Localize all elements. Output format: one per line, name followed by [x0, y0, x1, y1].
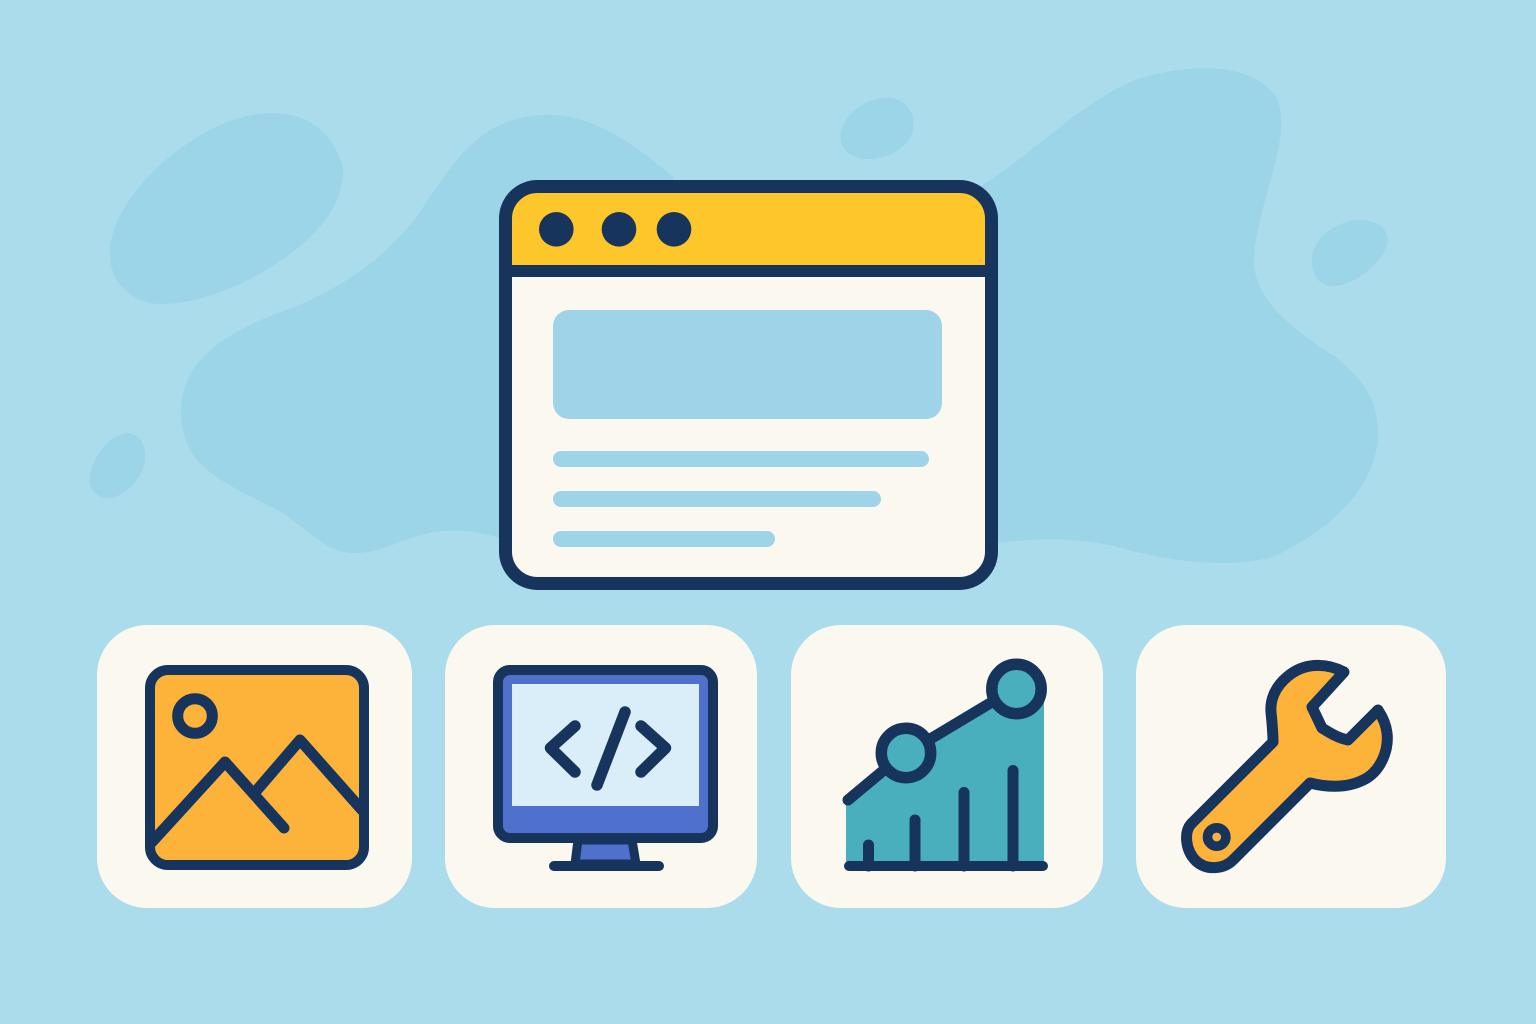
window body [506, 186, 992, 584]
background blobs [90, 68, 1388, 563]
card background [445, 625, 757, 908]
card: image [97, 625, 412, 908]
trend line [848, 702, 992, 800]
chart bars [868, 770, 1013, 866]
card: wrench [1136, 625, 1446, 908]
window control dots [539, 212, 691, 247]
text line placeholders [553, 451, 929, 547]
code symbol [550, 712, 666, 785]
wrench hole [1208, 828, 1226, 846]
chart nodes [881, 728, 931, 778]
monitor screen [512, 684, 699, 806]
chart area fill [846, 689, 1044, 862]
window outline [506, 186, 992, 584]
card background [791, 625, 1103, 908]
monitor stand [575, 840, 636, 864]
card background [97, 625, 412, 908]
blob: large central [181, 68, 1378, 563]
icon: picture [150, 670, 364, 865]
chart baseline [844, 861, 1048, 871]
blob: top centre [841, 98, 913, 159]
blob: top left [110, 113, 343, 304]
icon: wrench [1187, 665, 1387, 868]
title bar divider [505, 265, 992, 277]
window title bar [506, 186, 992, 271]
monitor frame [498, 670, 713, 838]
blob: right [1312, 220, 1388, 286]
card: code [445, 625, 757, 908]
card background [1136, 625, 1446, 908]
monitor base [549, 861, 664, 871]
card: chart [791, 625, 1103, 908]
blob: left [90, 433, 145, 498]
content image placeholder [553, 310, 942, 419]
icon: growth chart [844, 664, 1048, 871]
icon: monitor [498, 670, 713, 871]
browser window [505, 186, 992, 584]
